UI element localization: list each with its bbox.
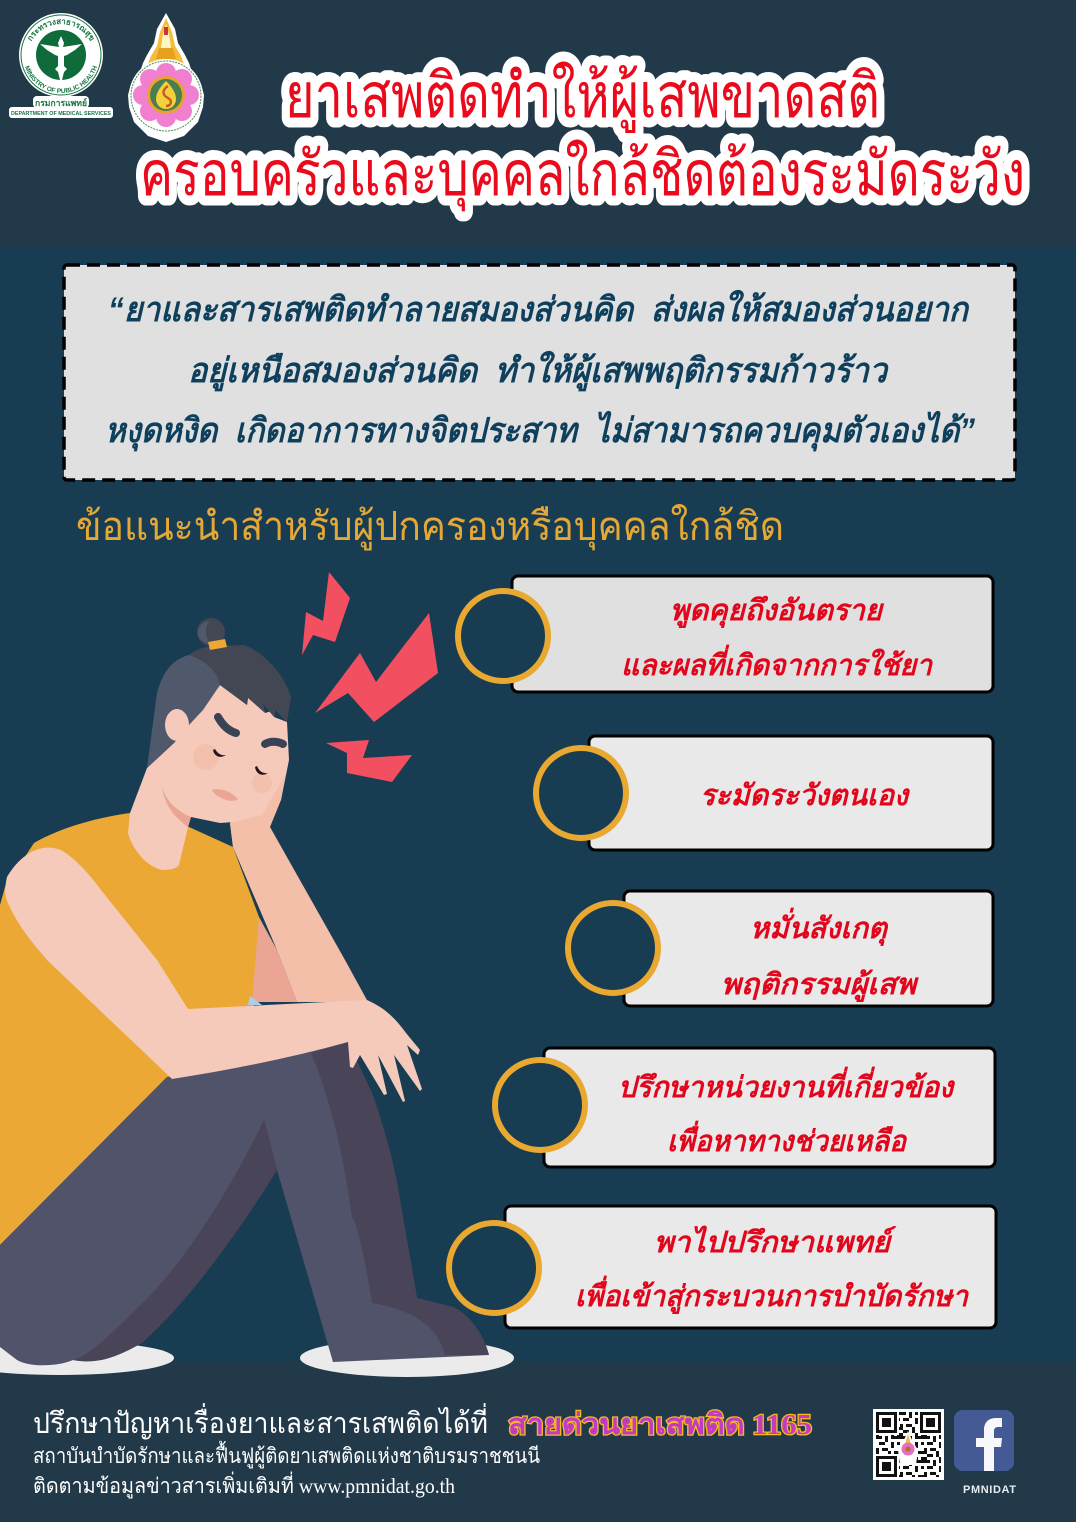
advice card 3 xyxy=(568,891,993,1006)
quote panel xyxy=(64,265,1015,480)
quote line 1: “ยาและสารเสพติดทำลายสมองส่วนคิด ส่งผลให้สมองส่วนอยาก xyxy=(108,289,970,329)
institute name: สถาบันบำบัดรักษาและฟื้นฟูผู้ติดยาเสพติดแห่งชาติบรมราชชนนี xyxy=(33,1441,540,1469)
icon: Facebook xyxy=(954,1410,1016,1496)
ring marker 5 xyxy=(449,1223,539,1313)
advice card 1: และผลที่เกิดจากการใช้ยา xyxy=(621,644,934,682)
advice card 1 xyxy=(458,576,993,692)
logo: Department of Medical Services: MINISTRY OF PUBLIC HEALTH xyxy=(25,66,97,93)
ring marker 1 xyxy=(458,591,548,681)
ring marker 3 xyxy=(568,903,658,993)
footer contact text xyxy=(33,1403,812,1499)
logo: Department of Medical Services xyxy=(9,13,113,118)
advice card 2 xyxy=(536,736,993,850)
title line 1: ยาเสพติดทำให้ผู้เสพขาดสติ xyxy=(285,61,880,133)
card 3 text: หมั่นสังเกตุ xyxy=(750,907,889,947)
hotline: สายด่วนยาเสพติด 1165 xyxy=(508,1409,812,1441)
card 4 text: ปรึกษาหน่วยงานที่เกี่ยวข้อง xyxy=(618,1066,956,1104)
ring marker 4 xyxy=(495,1060,585,1150)
advice card 5 xyxy=(449,1206,996,1328)
logo: Department of Medical Services: กรมการแพทย์ xyxy=(35,97,87,108)
quote line 2: อยู่เหนือสมองส่วนคิด ทำให้ผู้เสพพฤติกรรมก้าวร้าว xyxy=(188,350,890,392)
advice card 4: เพื่อหาทางช่วยเหลือ xyxy=(667,1120,908,1158)
website line: ติดตามข้อมูลข่าวสารเพิ่มเติมที่ www.pmnidat.go.th xyxy=(33,1471,455,1499)
QR code xyxy=(873,1409,944,1480)
advice card 3: พฤติกรรมผู้เสพ xyxy=(721,969,919,1003)
advice card 4 xyxy=(495,1048,995,1167)
card 1 text: พูดคุยถึงอันตราย xyxy=(670,595,885,629)
title: ยาเสพติดทำให้ผู้เสพขาดสติ xyxy=(285,61,880,133)
logo: Department of Medical Services: DEPARTMENT OF MEDICAL SERVICES xyxy=(11,111,111,117)
footer contact text: ปรึกษาปัญหาเรื่องยาและสารเสพติดได้ที่ xyxy=(33,1403,488,1440)
advice card 5: เพื่อเข้าสู่กระบวนการบำบัดรักษา xyxy=(575,1275,970,1315)
section heading: ข้อแนะนำสำหรับผู้ปกครองหรือบุคคลใกล้ชิด xyxy=(76,503,784,551)
ring marker 2 xyxy=(536,748,626,838)
illustration: worried person sitting xyxy=(0,618,514,1377)
illustration: lightning bolts xyxy=(302,572,438,782)
card 2 text: ระมัดระวังตนเอง xyxy=(700,780,911,812)
quote line 3: หงุดหงิด เกิดอาการทางจิตประสาท ไม่สามารถควบคุมตัวเองได้” xyxy=(105,410,975,452)
title xyxy=(140,61,1025,211)
logo: PMNIDAT institute emblem xyxy=(128,13,204,142)
Facebook page name: PMNIDAT xyxy=(963,1484,1016,1496)
card 5 text: พาไปปรึกษาแพทย์ xyxy=(654,1225,897,1259)
logo: Department of Medical Services: กระทรวงสาธารณสุข xyxy=(28,19,94,42)
